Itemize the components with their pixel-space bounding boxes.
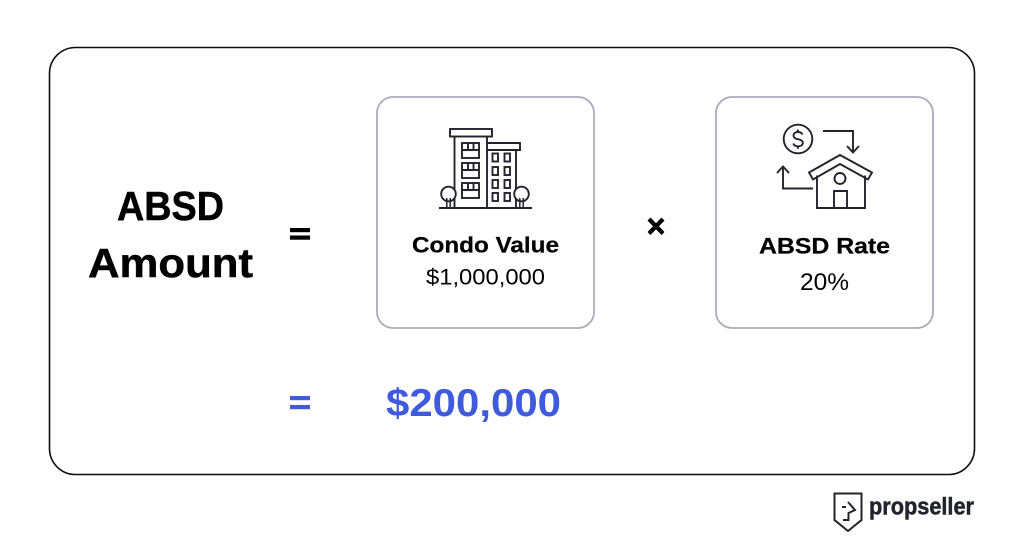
icon: shield	[834, 494, 862, 531]
logo: propseller	[834, 494, 974, 531]
value: rate: 20%	[800, 269, 849, 296]
wordmark: propseller	[869, 494, 974, 520]
main panel	[50, 48, 974, 474]
icon: condo building	[439, 129, 532, 208]
label: absd rate: ABSD Rate	[759, 234, 890, 258]
result amount: $200,000	[386, 382, 561, 425]
panel: condo value	[377, 97, 594, 328]
panel: absd rate	[716, 97, 933, 328]
equals sign	[290, 228, 310, 240]
label: condo value: Condo Value	[412, 232, 559, 258]
heading: ABSD Amount: Amount	[88, 240, 253, 286]
heading: ABSD Amount: ABSD	[117, 183, 224, 229]
result equals sign	[290, 396, 310, 409]
icon: house with money cycle	[777, 125, 872, 208]
heading: ABSD Amount	[88, 183, 253, 286]
multiply sign	[649, 219, 663, 234]
value: condo price: $1,000,000	[426, 264, 545, 290]
